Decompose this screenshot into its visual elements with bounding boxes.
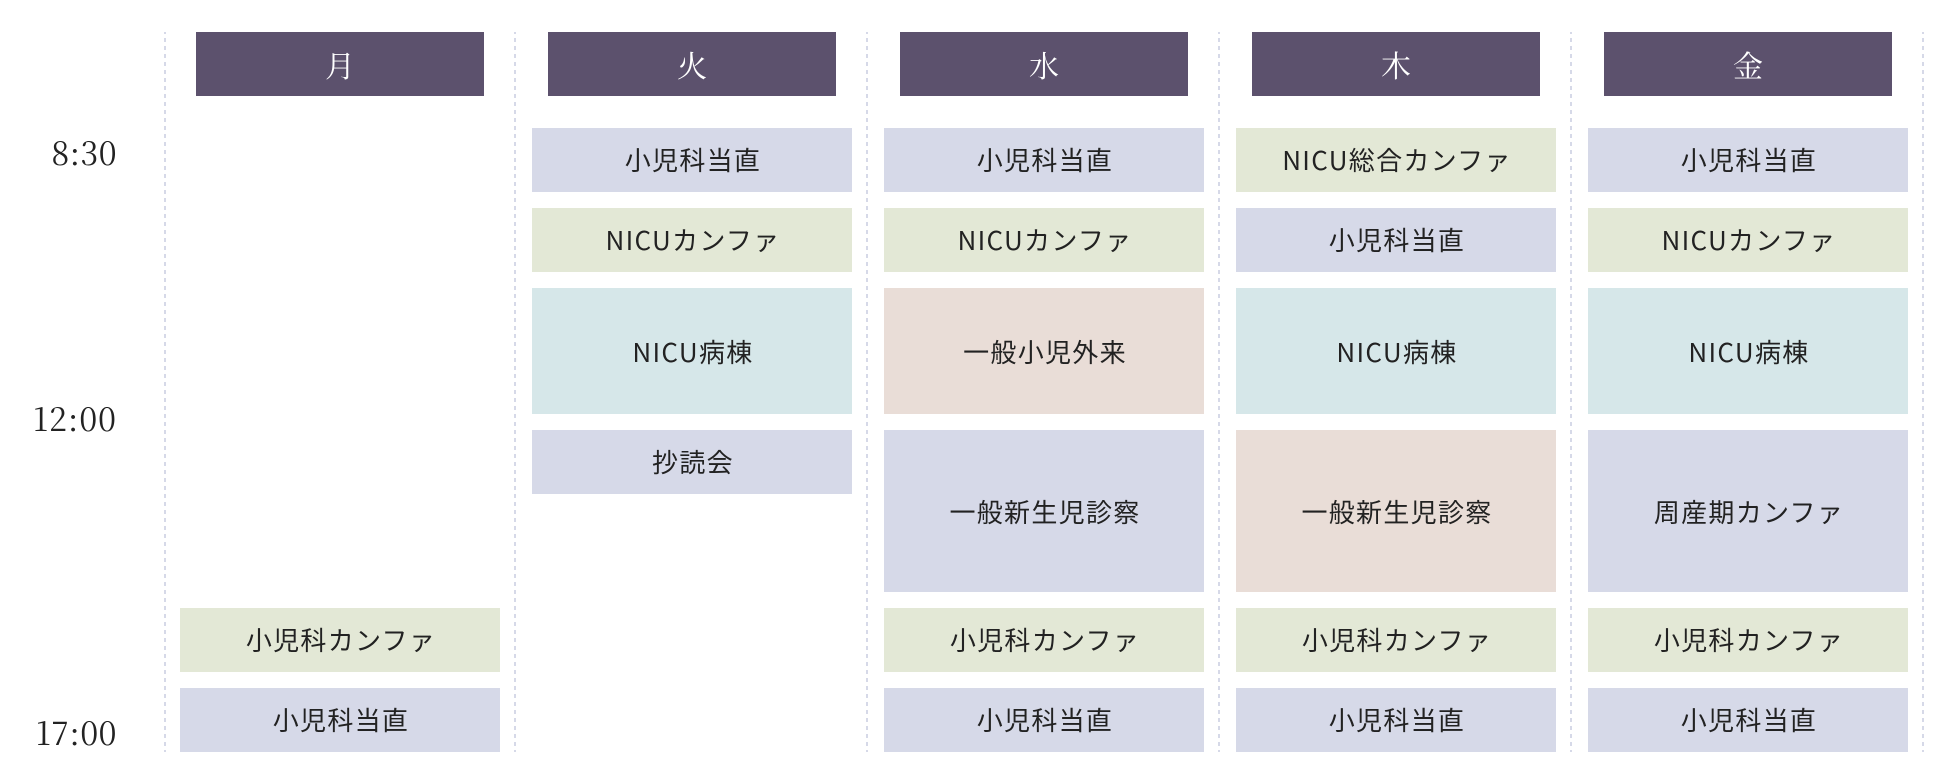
day header: Tuesday: 火 [677,51,707,84]
Friday block: pediatric conference [1588,608,1908,672]
Wednesday block: pediatric duty: 小児科当直 [977,140,1113,178]
Friday block: NICU conference [1588,208,1908,272]
Thursday block: NICU general conference [1236,128,1556,192]
day header: Monday [196,32,484,96]
Thursday block: pediatric duty [1236,688,1556,752]
Thursday block: pediatric duty [1236,208,1556,272]
Wednesday block: pediatric conference: 小児科カンファ [950,620,1140,658]
Wednesday block: pediatric duty: 小児科当直 [977,700,1113,738]
Thursday block: pediatric duty: 小児科当直 [1329,220,1465,258]
Monday block: pediatric duty [180,688,500,752]
Thursday block: NICU ward: NICU病棟 [1336,332,1458,370]
Friday block: pediatric duty: 小児科当直 [1681,700,1817,738]
Friday block: pediatric duty [1588,128,1908,192]
Monday block: pediatric conference: 小児科カンファ [246,620,436,658]
Thursday block: pediatric conference: 小児科カンファ [1302,620,1492,658]
Wednesday block: pediatric duty [884,128,1204,192]
Friday block: NICU conference: NICUカンファ [1662,220,1836,258]
Wednesday block: NICU conference: NICUカンファ [958,220,1132,258]
Tuesday block: NICU conference [532,208,852,272]
day header: Tuesday [548,32,836,96]
Thursday block: general newborn exam: 一般新生児診察 [1301,492,1493,530]
Tuesday block: journal club: 抄読会 [652,442,734,480]
Wednesday block: pediatric duty [884,688,1204,752]
day header: Friday: 金 [1733,51,1763,84]
day header: Wednesday [900,32,1188,96]
Tuesday block: pediatric duty [532,128,852,192]
Friday block: pediatric duty: 小児科当直 [1681,140,1817,178]
Thursday block: pediatric duty: 小児科当直 [1329,700,1465,738]
Thursday block: general newborn exam [1236,430,1556,592]
Friday block: pediatric duty [1588,688,1908,752]
Wednesday block: pediatric conference [884,608,1204,672]
Tuesday block: NICU ward: NICU病棟 [632,332,754,370]
Monday block: pediatric duty: 小児科当直 [273,700,409,738]
Thursday block: pediatric conference [1236,608,1556,672]
Wednesday block: general pediatric outpatient: 一般小児外来 [963,332,1127,370]
day header: Thursday: 木 [1381,51,1411,84]
time label: 17:00: 17:00 [36,709,117,755]
Wednesday block: NICU conference [884,208,1204,272]
Thursday block: NICU general conference: NICU総合カンファ [1282,140,1512,178]
Friday block: perinatal conference: 周産期カンファ [1654,492,1844,530]
time label: 8:30: 8:30 [51,129,117,175]
day header: Wednesday: 水 [1029,51,1059,84]
Friday block: NICU ward [1588,288,1908,414]
time label: 12:00: 12:00 [33,395,117,441]
Friday block: NICU ward: NICU病棟 [1688,332,1810,370]
Thursday block: NICU ward [1236,288,1556,414]
day header: Friday [1604,32,1892,96]
Tuesday block: NICU ward [532,288,852,414]
Friday block: pediatric conference: 小児科カンファ [1654,620,1844,658]
Monday block: pediatric conference [180,608,500,672]
day header: Monday: 月 [325,51,355,84]
Tuesday block: journal club [532,430,852,494]
Wednesday block: general newborn exam [884,430,1204,592]
Friday block: perinatal conference [1588,430,1908,592]
day header: Thursday [1252,32,1540,96]
Tuesday block: NICU conference: NICUカンファ [606,220,780,258]
Wednesday block: general pediatric outpatient [884,288,1204,414]
Tuesday block: pediatric duty: 小児科当直 [625,140,761,178]
Wednesday block: general newborn exam: 一般新生児診察 [949,492,1141,530]
